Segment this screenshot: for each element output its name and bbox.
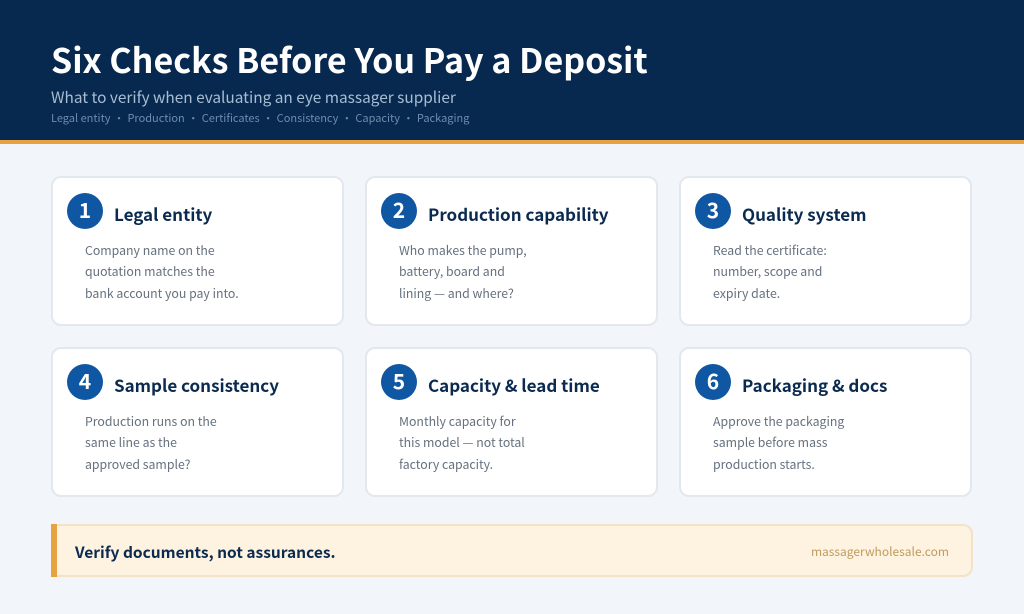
card 2: Production capability xyxy=(428,201,609,226)
card 2: lining — and where? xyxy=(399,284,514,302)
card 6: Packaging & docs xyxy=(742,372,887,397)
title: Six Checks Before You Pay a Deposit xyxy=(51,34,648,83)
card 6: sample before mass xyxy=(713,433,828,451)
card 1: 1 xyxy=(79,195,91,225)
card 2: 2 xyxy=(393,195,405,225)
callout bar xyxy=(51,524,973,577)
card 6 xyxy=(679,347,972,497)
card 3: 3 xyxy=(707,195,719,225)
card 1: quotation matches the xyxy=(85,262,215,280)
card 1: bank account you pay into. xyxy=(85,284,239,302)
card 2: Who makes the pump, xyxy=(399,241,527,259)
card 4 xyxy=(51,347,344,497)
card 5: Monthly capacity for xyxy=(399,412,516,430)
card 4: same line as the xyxy=(85,433,177,451)
card 6: Approve the packaging xyxy=(713,412,844,430)
subtitle: What to verify when evaluating an eye massager supplier xyxy=(51,86,456,108)
card 4: Sample consistency xyxy=(114,372,279,397)
card 3: expiry date. xyxy=(713,284,780,302)
card 3: Quality system xyxy=(742,201,867,226)
card 3: Read the certificate: xyxy=(713,241,827,259)
card 5 xyxy=(365,347,658,497)
topic list: Legal entity · Production · Certificates · Consistency · Capacity · Packaging xyxy=(51,110,469,126)
card 2 xyxy=(365,176,658,326)
card 1: Legal entity xyxy=(114,201,212,226)
card 5: factory capacity. xyxy=(399,455,493,473)
card 1 xyxy=(51,176,344,326)
card 4: approved sample? xyxy=(85,455,190,473)
website: massagerwholesale.com xyxy=(811,543,949,560)
card 3: number, scope and xyxy=(713,262,822,280)
card 4: 4 xyxy=(79,366,91,396)
card 2: battery, board and xyxy=(399,262,505,280)
card 5: 5 xyxy=(393,366,405,396)
callout accent xyxy=(51,524,57,577)
card 1: Company name on the xyxy=(85,241,215,259)
card 6: production starts. xyxy=(713,455,815,473)
card 6: 6 xyxy=(707,366,719,396)
header band xyxy=(0,0,1024,144)
card 5: this model — not total xyxy=(399,433,525,451)
callout text: Verify documents, not assurances. xyxy=(75,541,336,563)
card 4: Production runs on the xyxy=(85,412,217,430)
card 5: Capacity & lead time xyxy=(428,372,600,397)
card 3 xyxy=(679,176,972,326)
